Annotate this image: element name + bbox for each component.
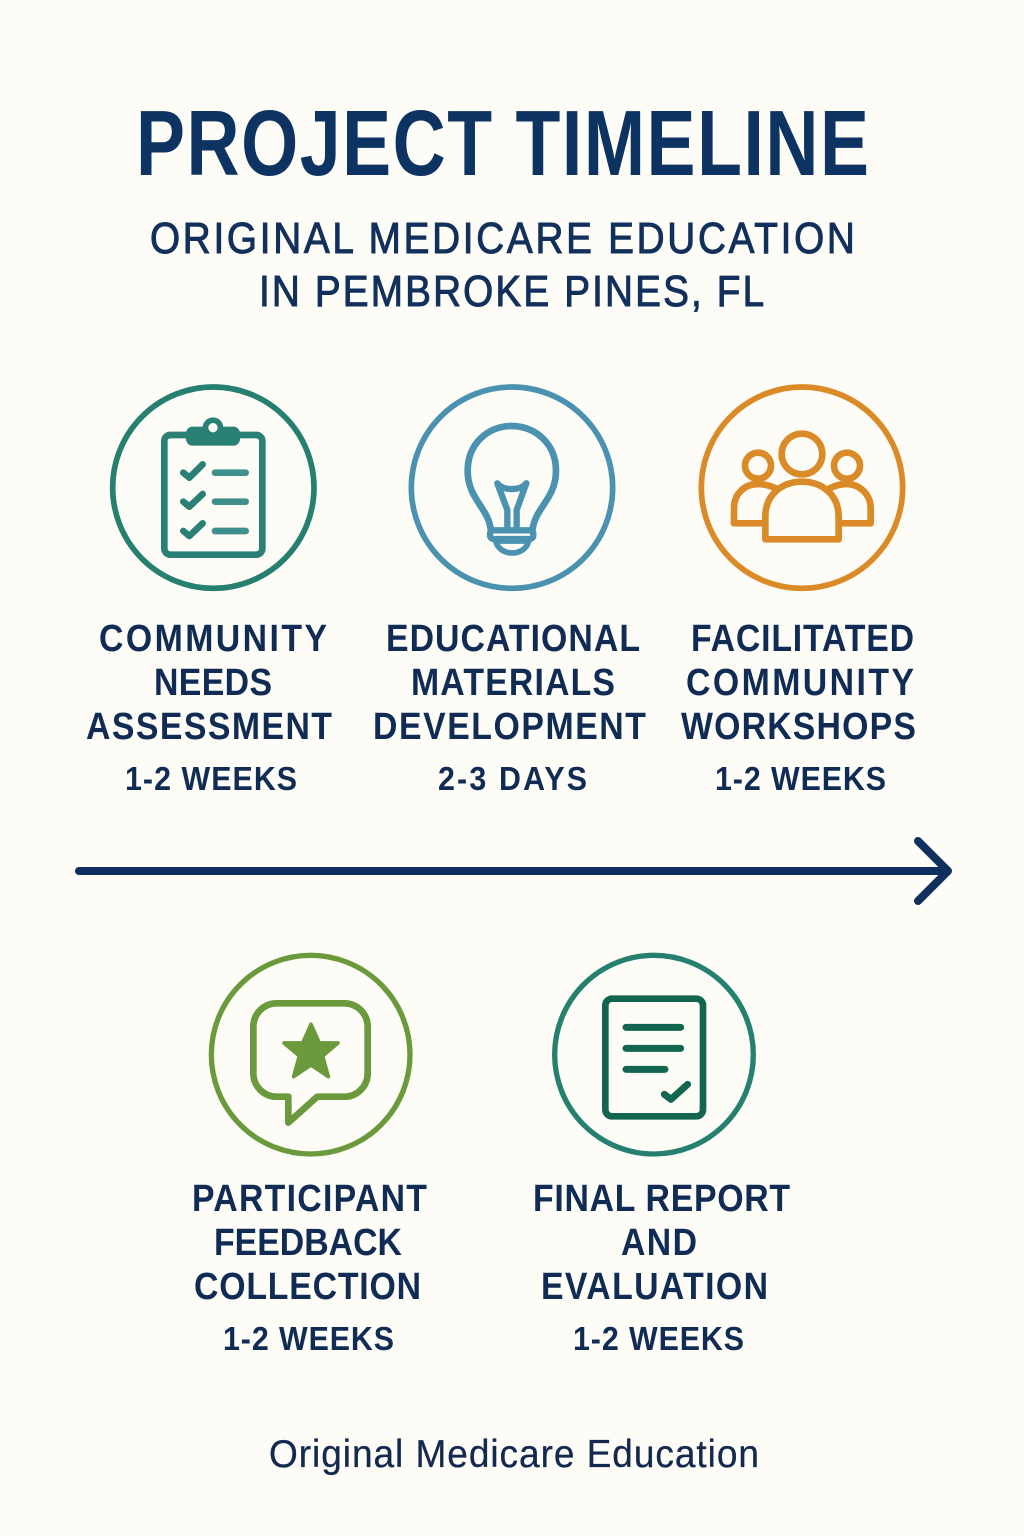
label: final report and evaluation: FINAL REPORT xyxy=(533,1176,790,1219)
subtitle xyxy=(150,213,855,316)
subtitle: IN PEMBROKE PINES, FL xyxy=(259,266,764,316)
label: community needs assessment: ASSESSMENT xyxy=(86,704,332,747)
label: educational materials development xyxy=(373,616,646,747)
label: educational materials development: MATERIALS xyxy=(411,660,615,703)
icon: report document with check xyxy=(555,955,753,1154)
duration: 1-2 weeks: 1-2 WEEKS xyxy=(715,760,886,797)
icon: speech bubble with star xyxy=(211,955,410,1154)
duration: 2-3 days: 2-3 DAYS xyxy=(438,760,587,797)
duration: 1-2 weeks: 1-2 WEEKS xyxy=(573,1320,744,1357)
label: facilitated community workshops: WORKSHOPS xyxy=(681,704,916,747)
label: educational materials development: EDUCATIONAL xyxy=(386,616,640,659)
step: facilitated community workshops xyxy=(681,387,916,797)
step: final report and evaluation xyxy=(533,955,790,1357)
label: educational materials development: DEVELOPMENT xyxy=(373,704,646,747)
step: educational materials development xyxy=(373,387,646,797)
subtitle: ORIGINAL MEDICARE EDUCATION xyxy=(150,213,855,263)
arrow: timeline xyxy=(79,841,948,901)
step: participant feedback collection xyxy=(192,955,427,1357)
duration: 1-2 weeks: 1-2 WEEKS xyxy=(125,760,297,797)
label: community needs assessment xyxy=(86,616,332,747)
label: facilitated community workshops: FACILITATED xyxy=(691,616,914,659)
label: participant feedback collection: FEEDBACK xyxy=(214,1220,402,1263)
label: final report and evaluation xyxy=(533,1176,790,1307)
icon: three people xyxy=(701,387,903,588)
label: participant feedback collection: COLLECTION xyxy=(194,1264,421,1307)
icon: clipboard checklist xyxy=(113,387,314,588)
label: community needs assessment: NEEDS xyxy=(154,660,272,703)
label: facilitated community workshops: COMMUNITY xyxy=(686,660,914,703)
label: participant feedback collection: PARTICIPANT xyxy=(192,1176,427,1219)
label: community needs assessment: COMMUNITY xyxy=(99,616,327,659)
footer: Original Medicare Education xyxy=(269,1433,759,1476)
label: final report and evaluation: EVALUATION xyxy=(541,1264,768,1307)
title: PROJECT TIMELINE xyxy=(136,91,869,195)
label: participant feedback collection xyxy=(192,1176,427,1307)
label: final report and evaluation: AND xyxy=(621,1220,697,1263)
label: facilitated community workshops xyxy=(681,616,916,747)
icon: light bulb xyxy=(411,387,613,588)
step: community needs assessment xyxy=(86,387,332,797)
duration: 1-2 weeks: 1-2 WEEKS xyxy=(223,1320,394,1357)
